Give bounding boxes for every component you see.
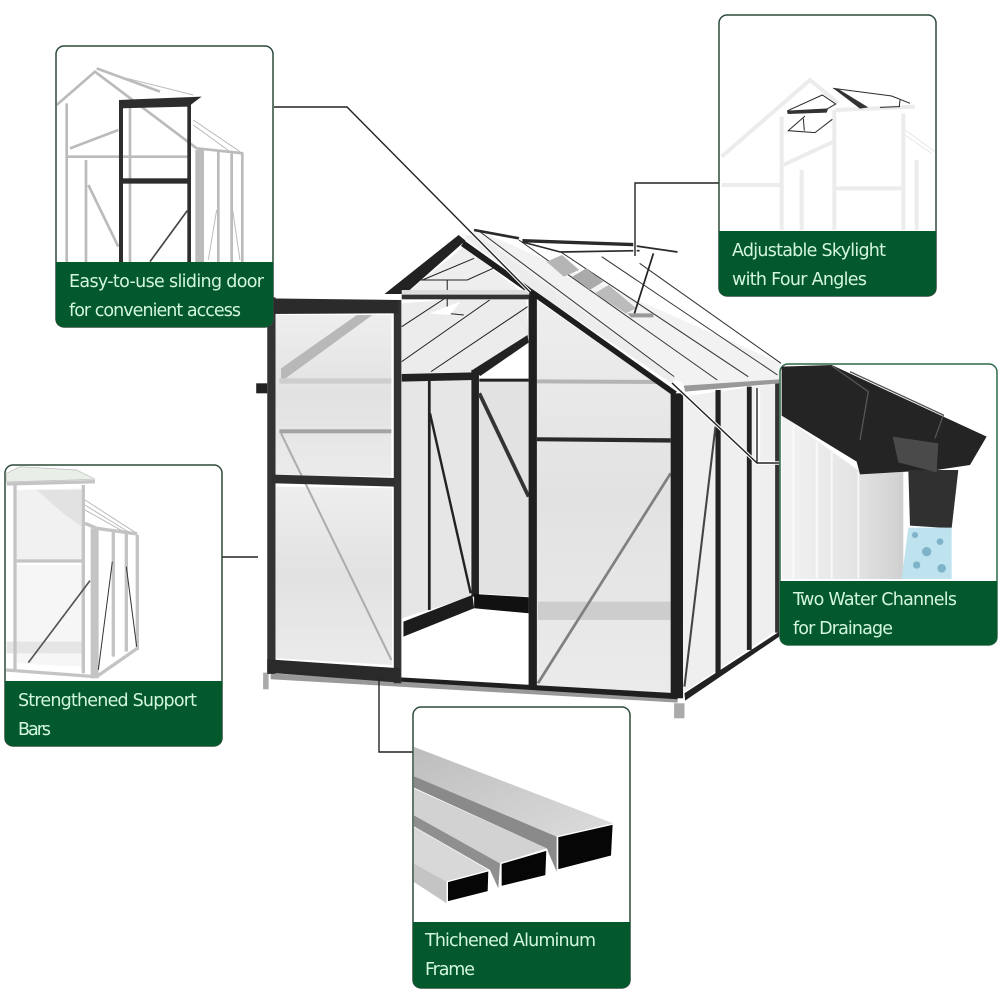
- thumbnail: skylight: [722, 80, 935, 230]
- caption bar: skylight: with Four Angles: [732, 270, 867, 290]
- caption bar: door: for convenient access: [69, 301, 241, 321]
- sliding door: [256, 297, 401, 683]
- caption bar: aluminum frame: Frame: [425, 960, 475, 980]
- panel: skylight: [719, 15, 936, 296]
- caption bar: aluminum frame: [413, 922, 630, 988]
- panel: aluminum frame: [413, 707, 630, 988]
- thumbnail: aluminum bars: [413, 747, 613, 903]
- roof panel: [464, 230, 781, 386]
- caption bar: skylight: [719, 231, 936, 296]
- thumbnail: support bars: [6, 467, 137, 678]
- front right panel: [536, 300, 671, 693]
- front frame: [263, 290, 684, 718]
- caption bar: door: Easy-to-use sliding door: [69, 272, 265, 292]
- caption bar: support bars: Bars: [18, 720, 51, 740]
- caption bar: aluminum frame: Thichened Aluminum: [424, 931, 596, 951]
- interior back wall: [402, 247, 529, 637]
- skylight: [474, 230, 678, 317]
- callout lines: [222, 107, 779, 752]
- thumbnail: door: [57, 68, 243, 263]
- caption bar: door: [56, 262, 273, 327]
- caption bar: water channels: for Drainage: [793, 619, 893, 639]
- panel: water channels: [780, 364, 997, 645]
- caption bar: support bars: Strengthened Support: [18, 691, 197, 711]
- caption bar: water channels: [780, 581, 997, 645]
- main greenhouse illustration: [256, 230, 781, 718]
- side wall: [683, 379, 779, 701]
- front gable and roof edge: [384, 235, 677, 396]
- caption bar: water channels: Two Water Channels: [792, 590, 957, 610]
- thumbnail: gutter and downpipe: [782, 365, 987, 579]
- caption bar: skylight: Adjustable Skylight: [732, 241, 886, 261]
- panel: sliding door: [56, 46, 273, 327]
- caption bar: support bars: [5, 681, 222, 746]
- panel: support bars: [5, 465, 222, 746]
